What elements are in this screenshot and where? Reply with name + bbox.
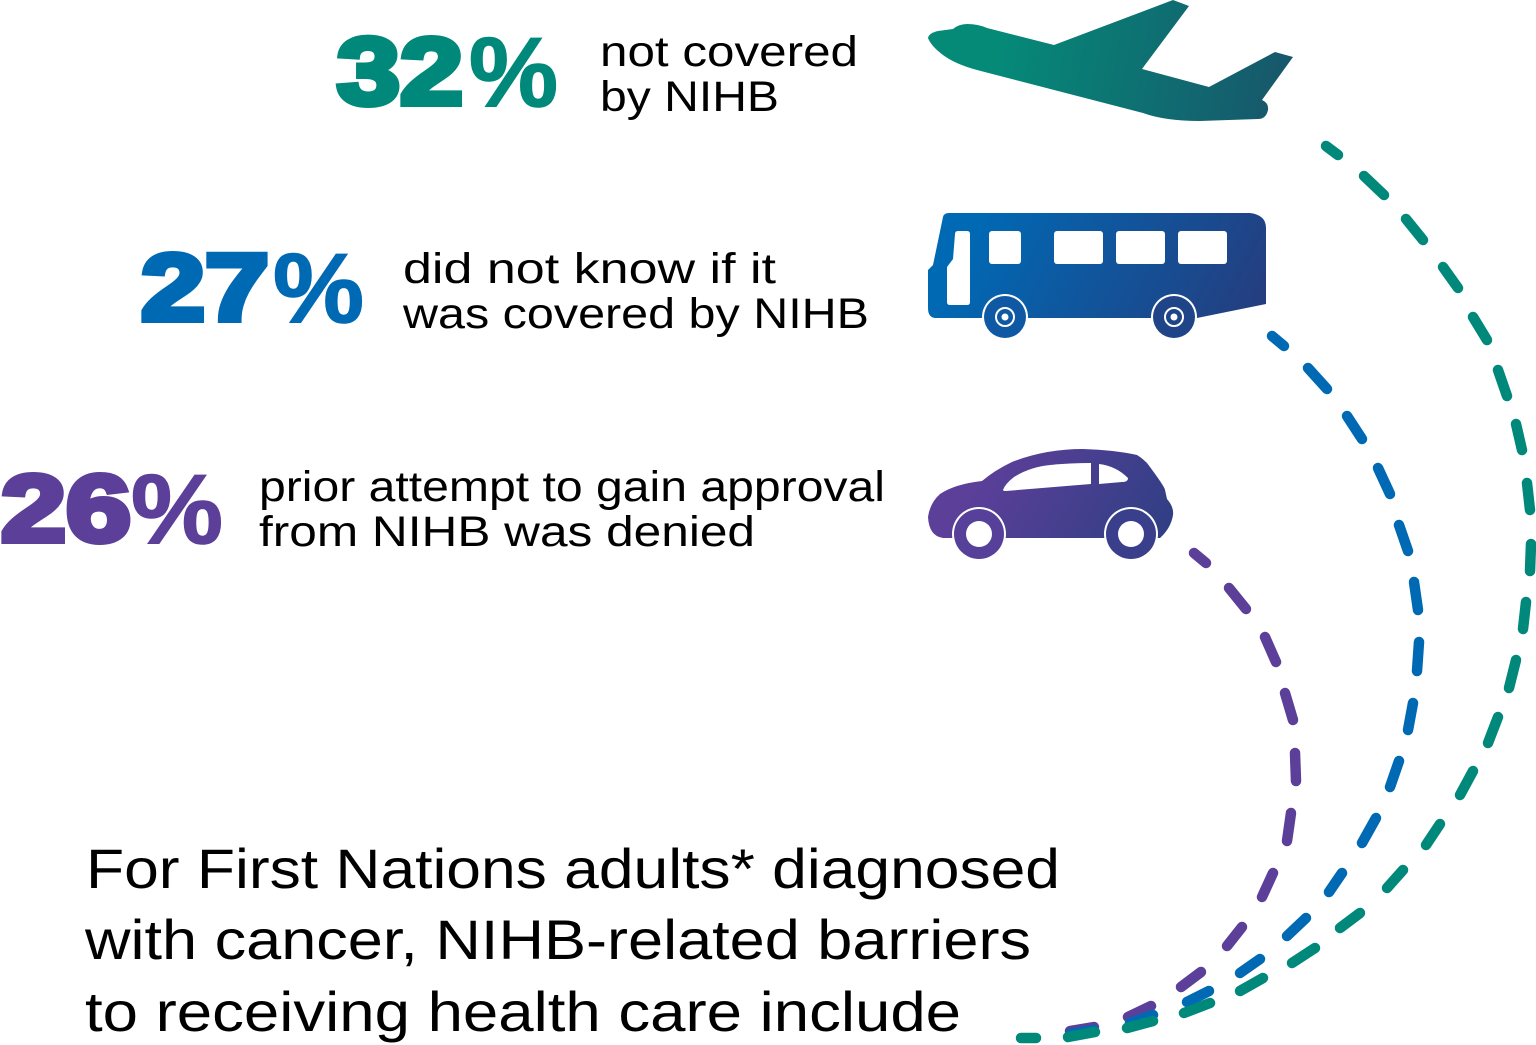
percentage 26%: % [131, 454, 223, 564]
statistic: 32% not covered [337, 17, 858, 127]
bus wheel rear [1151, 294, 1197, 340]
percentage 26% [1, 454, 223, 564]
percentage 27%: % [273, 233, 364, 343]
label: did not know if it was covered by NIHB: did not know if it [403, 245, 776, 293]
percentage 32%: % [469, 17, 558, 127]
label: not covered by NIHB: by NIHB [600, 73, 779, 121]
dashed arc: bus route (blue) [1070, 336, 1419, 1034]
bus wheel front [982, 294, 1028, 340]
car wheel front [952, 507, 1006, 561]
label: not covered by NIHB: not covered [600, 28, 858, 76]
icon: bus [928, 213, 1266, 340]
label: did not know if it was covered by NIHB [402, 245, 869, 338]
icon: car [928, 449, 1173, 561]
label: not covered by NIHB [600, 28, 858, 121]
heading: first nations adults statement [84, 837, 1060, 1043]
percentage 27%: 27 [141, 235, 269, 341]
percentage 26%: 26 [1, 456, 131, 562]
dashed arc: plane route (green) [1021, 146, 1531, 1038]
label: prior attempt to gain approval from NIHB was denied: prior attempt to gain approval [259, 463, 885, 511]
icon: airplane [928, 0, 1293, 121]
car wheel rear [1104, 507, 1158, 561]
car windows [1003, 463, 1128, 491]
statistic: 26% denied [1, 454, 885, 564]
statistic: 27% did not know [141, 233, 869, 343]
heading: first nations adults statement: with cancer, NIHB-related barriers [84, 908, 1031, 971]
label: did not know if it was covered by NIHB: was covered by NIHB [402, 290, 869, 338]
dashed arc: car route (purple) [1070, 553, 1296, 1031]
label: prior attempt to gain approval from NIHB was denied: from NIHB was denied [259, 508, 755, 556]
percentage 32%: 32 [337, 19, 463, 125]
heading: first nations adults statement: to receiving health care include [85, 980, 961, 1043]
percentage 32% [337, 17, 558, 127]
percentage 27% [141, 233, 364, 343]
heading: first nations adults statement: For First Nations adults* diagnosed [86, 837, 1060, 900]
bus windows [947, 231, 1227, 305]
label: prior attempt to gain approval from NIHB was denied [259, 463, 885, 556]
